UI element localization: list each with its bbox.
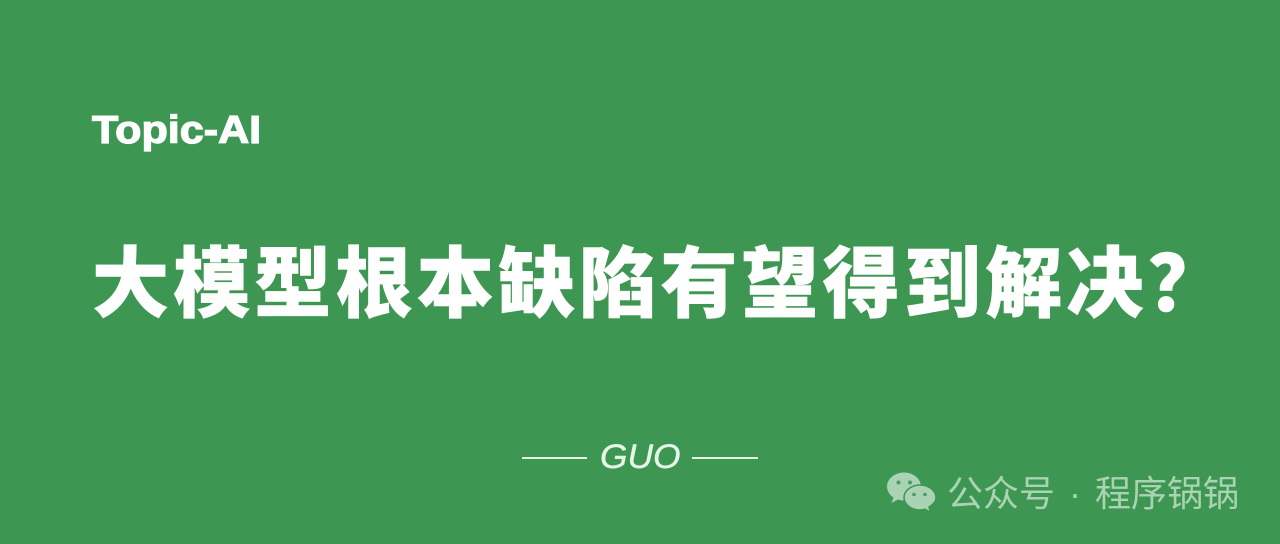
tag: Topic-AI: Topic-AI: [92, 109, 261, 152]
watermark text: ·: [1069, 473, 1081, 514]
watermark text: 公众号 程序锅锅: [947, 473, 1239, 514]
right rule: [692, 457, 758, 459]
watermark: [887, 472, 1239, 514]
title: 大模型根本缺陷有望得到解决？: [92, 242, 1229, 328]
icon: wechat: [887, 472, 936, 511]
author name: GUO: [600, 438, 681, 476]
left rule: [522, 457, 587, 459]
